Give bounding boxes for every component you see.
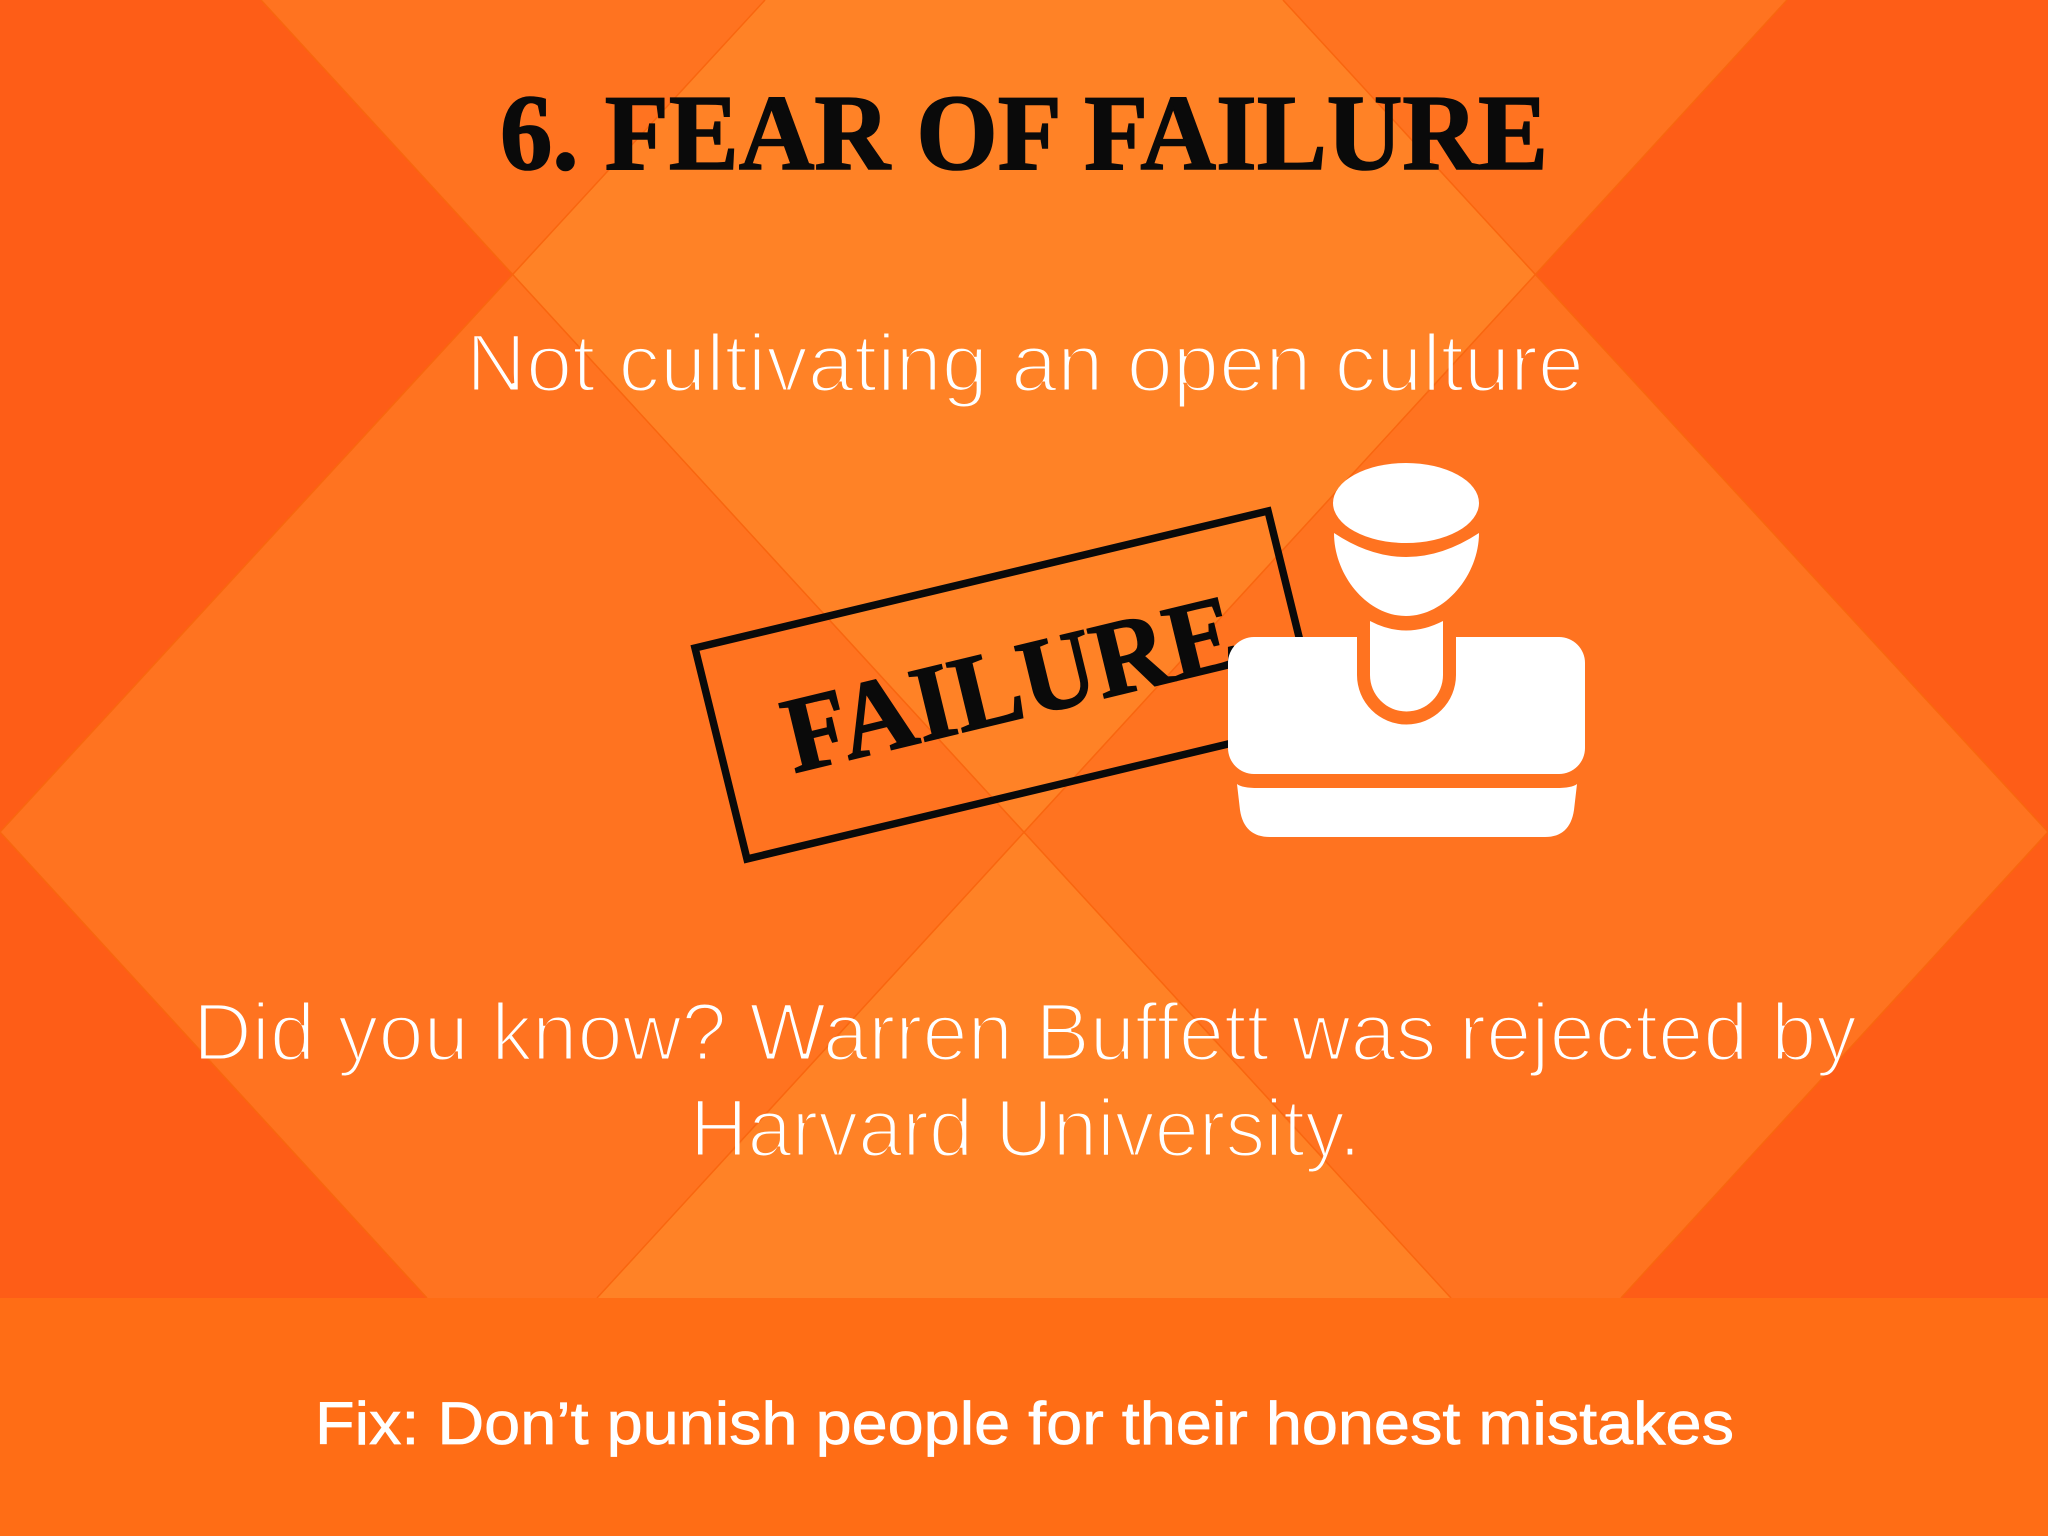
title: 6. FEAR OF FAILURE [500,74,1548,193]
stamped failure mark: FAILURE [772,572,1249,796]
did you know text block: Did you know? Warren Buffett was rejected by [193,987,1857,1078]
did you know text block: Harvard University. [690,1083,1361,1174]
icon: stamp [1228,463,1585,837]
stamped failure mark [695,511,1320,859]
did you know text block [193,987,1857,1174]
footer band [0,1298,2048,1536]
rubber stamp illustration [695,463,1585,859]
fix text: Fix: Don’t punish people for their honest mistakes [315,1390,1734,1457]
subtitle: Not cultivating an open culture [466,318,1584,409]
